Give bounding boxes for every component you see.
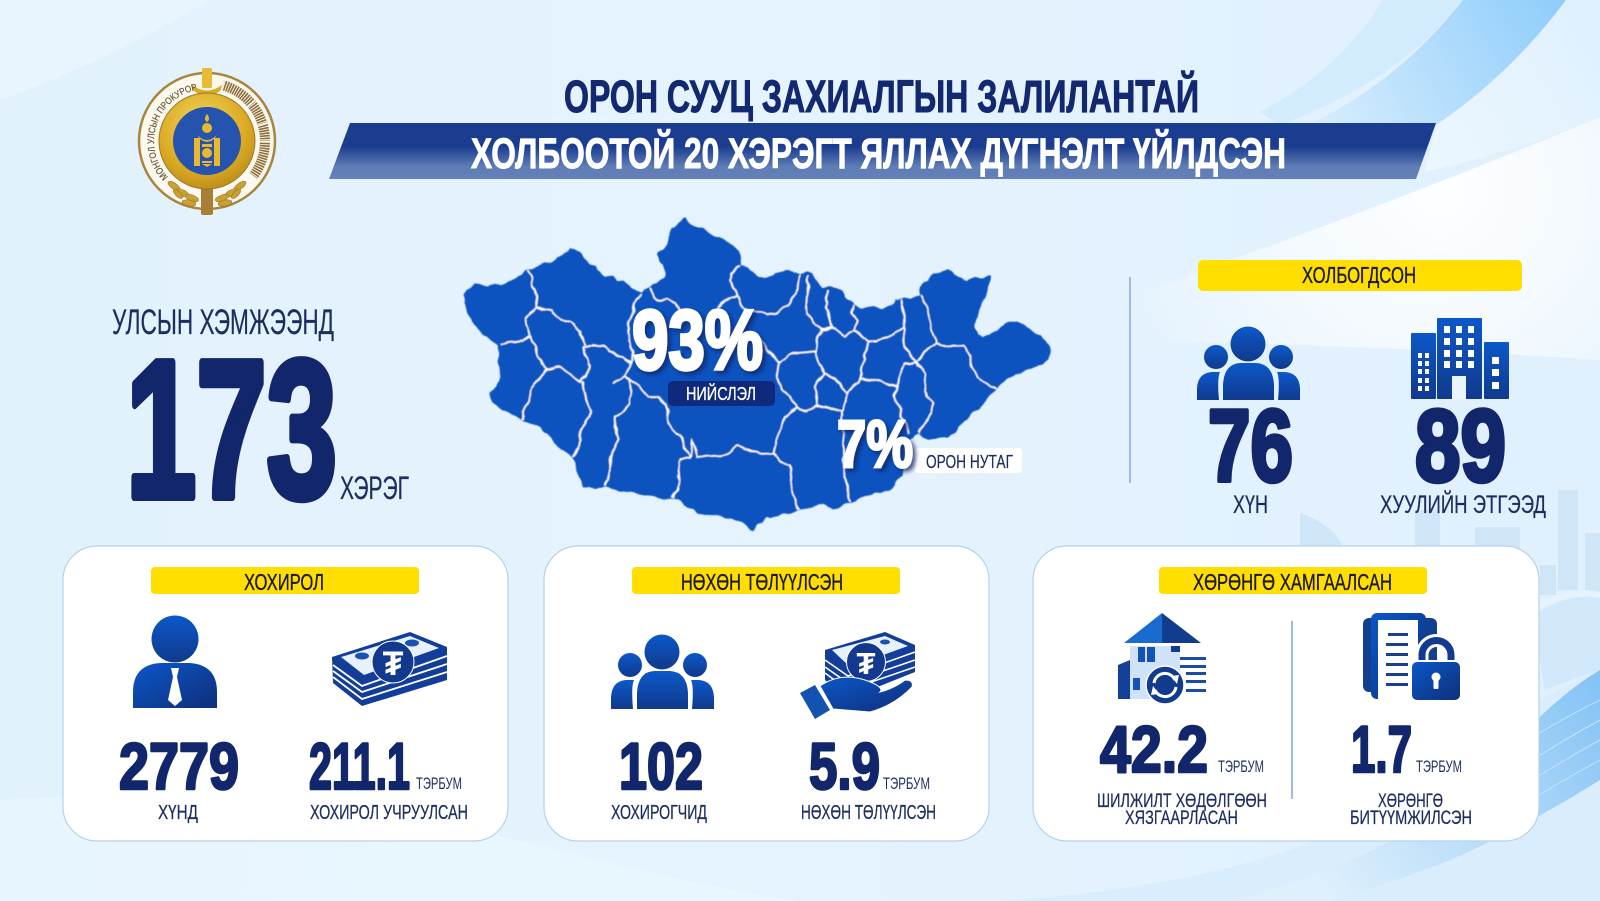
compensation heading: НӨХӨН ТӨЛҮҮЛСЭН [681, 569, 843, 595]
frozen assets label: БИТҮҮМЖИЛСЭН [1350, 808, 1472, 829]
victims count: 2779 [119, 729, 239, 803]
frozen assets label: ХӨРӨНГӨ [1378, 791, 1443, 812]
icon: victims group [611, 634, 714, 709]
compensation label: НӨХӨН ТӨЛҮҮЛСЭН [801, 802, 936, 824]
national total [112, 303, 409, 539]
panel: damage [63, 546, 508, 841]
frozen assets unit: ТЭРБУМ [1416, 757, 1462, 776]
involved heading: ХОЛБОГДСОН [1302, 262, 1416, 288]
involved heading [1198, 260, 1522, 291]
national label: УЛСЫН ХЭМЖЭЭНД [112, 303, 334, 342]
icon: buildings [1411, 318, 1509, 399]
persons count: 76 [1208, 389, 1293, 503]
icon: hand with money: ₮ [857, 646, 876, 681]
title banner: ХОЛБООТОЙ 20 ХЭРЭГТ ЯЛЛАХ ДҮГНЭЛТ ҮЙЛДСЭН [471, 129, 1286, 178]
icon: stack of money [332, 632, 447, 706]
section: involved [1197, 260, 1546, 519]
logo: prosecutor emblem [138, 68, 276, 215]
rural pill: ОРОН НУТАГ [926, 452, 1013, 472]
frozen transactions unit: ТЭРБУМ [1218, 757, 1264, 776]
damage heading: ХОХИРОЛ [244, 569, 324, 595]
victims label: ХҮНД [158, 802, 198, 824]
damage amount: 211.1 [309, 729, 410, 803]
capital share: 93% [632, 293, 763, 387]
province borders [501, 267, 995, 510]
compensated victims label: ХОХИРОГЧИД [611, 802, 707, 824]
capital pill [668, 381, 775, 406]
frozen transactions label: ШИЛЖИЛТ ХӨДӨЛГӨӨН [1097, 791, 1267, 812]
national unit: ХЭРЭГ [340, 470, 409, 506]
logo: prosecutor emblem: МОНГОЛ УЛСЫН ПРОКУРОР [147, 84, 196, 181]
icon: hand with money [800, 632, 915, 719]
frozen assets amount: 1.7 [1351, 712, 1412, 786]
title banner [329, 123, 1436, 179]
damage unit: ТЭРБУМ [416, 774, 462, 793]
frozen transactions amount: 42.2 [1100, 712, 1208, 786]
national number: 173 [126, 320, 337, 539]
legal entities label: ХУУЛИЙН ЭТГЭЭД [1380, 489, 1546, 519]
capital pill: НИЙСЛЭЛ [686, 383, 756, 404]
divider [1129, 277, 1131, 483]
compensation unit: ТЭРБУМ [883, 774, 930, 793]
rural pill [915, 448, 1022, 473]
persons label: ХҮН [1233, 491, 1268, 519]
icon: people [1197, 326, 1300, 400]
map of Mongolia [464, 218, 1051, 530]
damage label: ХОХИРОЛ УЧРУУЛСАН [310, 802, 468, 824]
panel: compensation [544, 546, 989, 841]
frozen transactions label [1097, 791, 1267, 829]
icon: document with lock [1363, 613, 1462, 702]
panel divider [1291, 621, 1293, 799]
icon: person with tie [133, 616, 217, 708]
compensation amount: 5.9 [809, 729, 880, 803]
icon: stack of money: ₮ [383, 645, 404, 683]
frozen assets label [1350, 791, 1472, 829]
title: ОРОН СУУЦ ЗАХИАЛГЫН ЗАЛИЛАНТАЙ [564, 71, 1199, 122]
map outline [464, 218, 1051, 530]
compensated victims count: 102 [619, 729, 703, 803]
asset heading: ХӨРӨНГӨ ХАМГААЛСАН [1193, 569, 1392, 595]
rural share: 7% [837, 407, 913, 482]
icon: house with transfer [1118, 613, 1206, 704]
legal entities count: 89 [1415, 389, 1506, 503]
frozen transactions label: ХЯЗГААРЛАСАН [1125, 808, 1238, 829]
panel: asset protection [1033, 546, 1539, 841]
damage heading [151, 567, 419, 595]
